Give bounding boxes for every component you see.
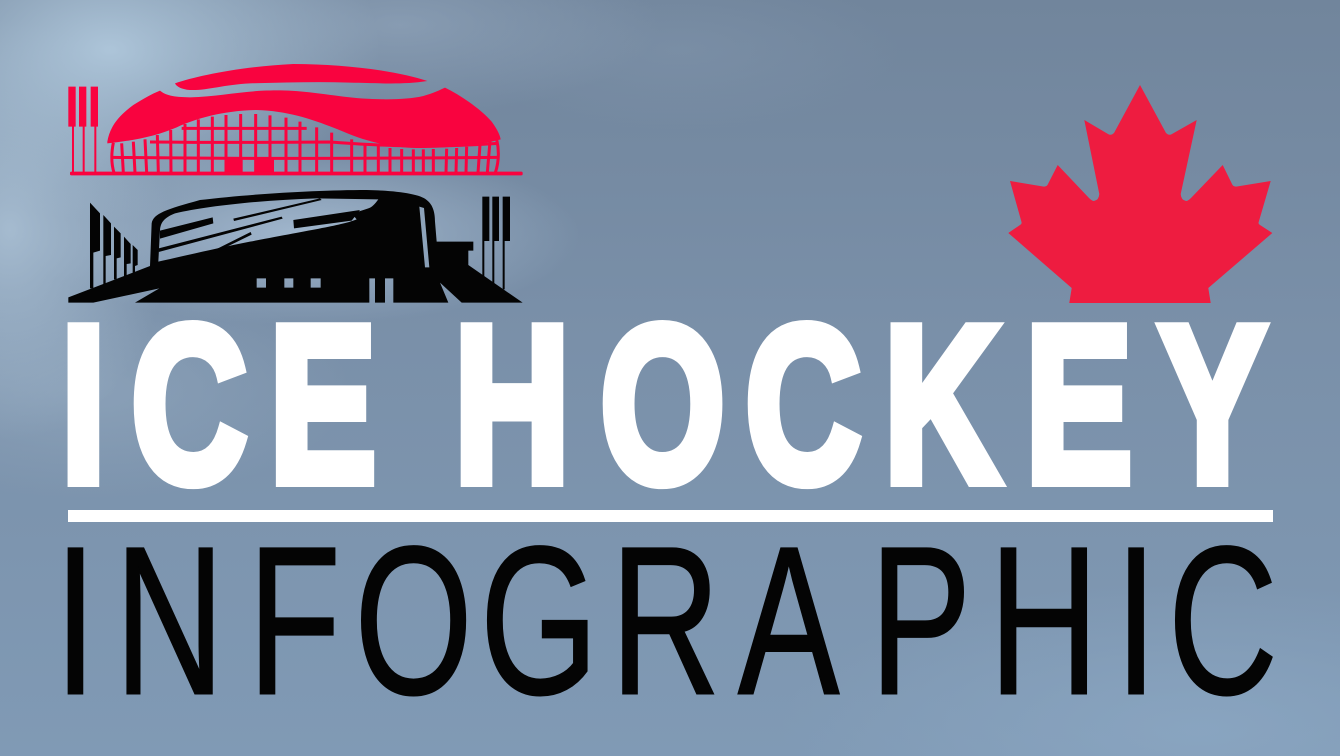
stadium lattice bbox=[112, 114, 498, 173]
icon: black arena bbox=[68, 190, 523, 303]
stadium towers bbox=[68, 87, 98, 173]
title: ICE HOCKEY: ICE HOCKEY bbox=[61, 280, 1266, 528]
arena towers right bbox=[482, 197, 510, 289]
arena flags left bbox=[90, 203, 138, 288]
icon: maple leaf bbox=[1008, 85, 1272, 303]
icon: red domed stadium bbox=[68, 64, 523, 175]
stadium entrance bbox=[225, 158, 274, 173]
divider rule bbox=[68, 510, 1273, 522]
arena window struts bbox=[159, 198, 360, 254]
stadium ground line bbox=[70, 172, 523, 175]
subtitle: INFOGRAPHIC: INFOGRAPHIC bbox=[54, 503, 1278, 738]
